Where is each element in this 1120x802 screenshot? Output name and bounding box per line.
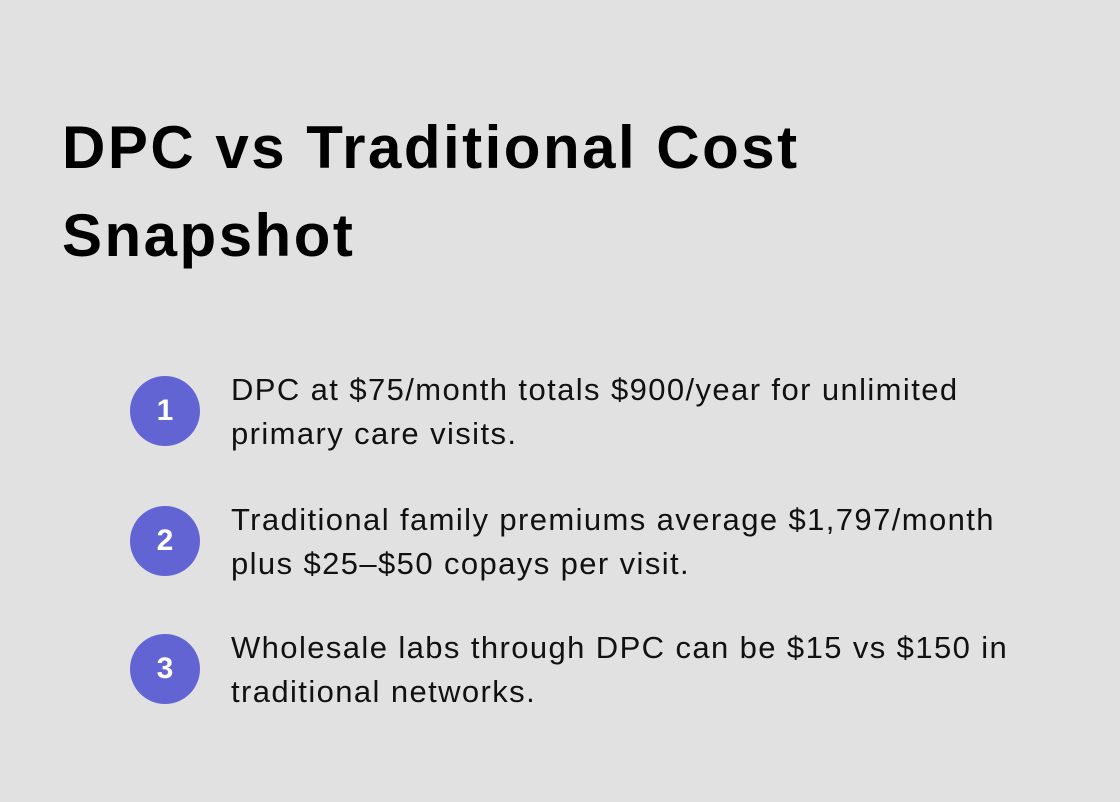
text 3	[231, 630, 1008, 709]
icon: number 2	[130, 506, 200, 576]
item 1	[130, 372, 958, 451]
title: Snapshot	[62, 202, 355, 269]
text 1	[231, 372, 958, 451]
icon: number 3: 3	[157, 652, 173, 685]
icon: number 1: 1	[157, 394, 173, 427]
text 2	[231, 502, 995, 581]
text 2: Traditional family premiums average $1,797/month	[231, 502, 995, 537]
text 3: traditional networks.	[231, 674, 536, 709]
item 3	[130, 630, 1008, 709]
icon: number 1	[130, 376, 200, 446]
icon: number 3	[130, 634, 200, 704]
title	[62, 114, 800, 269]
text 2: plus $25–$50 copays per visit.	[231, 546, 690, 581]
text 3: Wholesale labs through DPC can be $15 vs $150 in	[231, 630, 1008, 665]
text 1: DPC at $75/month totals $900/year for unlimited	[231, 372, 958, 407]
icon: number 2: 2	[157, 524, 173, 557]
title: DPC vs Traditional Cost	[62, 114, 800, 181]
item 2	[130, 502, 995, 581]
text 1: primary care visits.	[231, 416, 517, 451]
